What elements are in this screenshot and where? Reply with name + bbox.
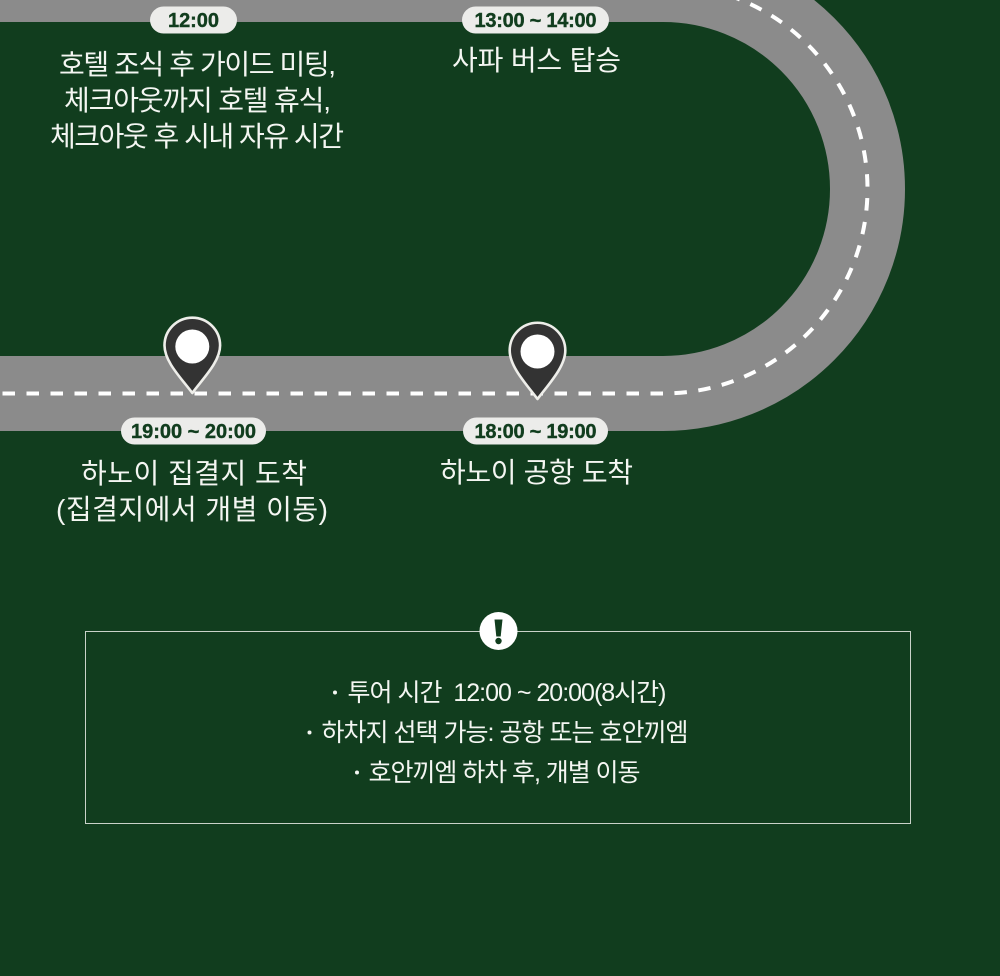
time pill: 12:00: [150, 6, 237, 34]
text: hanoi meeting point: (집결지에서 개별 이동): [56, 494, 328, 525]
time pill: 18:00 ~ 19:00: [463, 418, 608, 444]
text: hotel schedule: [50, 49, 344, 152]
time pill: 13:00 ~ 14:00: [462, 6, 609, 34]
notice box: [86, 632, 910, 824]
icon: exclamation: [480, 612, 518, 650]
pin: 하노이 집결지: [164, 318, 220, 393]
text: hanoi meeting point: 하노이 집결지 도착: [81, 458, 307, 489]
road: [0, 0, 868, 394]
pin: 하노이 공항: [510, 323, 565, 399]
text: hanoi airport: 하노이 공항 도착: [440, 457, 633, 488]
time pill: 19:00 ~ 20:00: 19:00 ~ 20:00: [131, 421, 256, 443]
notice text: 투어 시간 12:00 ~ 20:00(8시간): [348, 679, 666, 707]
text: sapa bus: 사파 버스 탑승: [452, 45, 621, 76]
text: hotel schedule: 호텔 조식 후 가이드 미팅,: [59, 49, 336, 80]
notice bullets: [308, 690, 359, 774]
notice text: 호안끼엠 하차 후, 개별 이동: [368, 759, 640, 787]
text: hanoi meeting point: [56, 458, 328, 525]
notice text: 하차지 선택 가능: 공항 또는 호안끼엠: [322, 719, 688, 747]
notice text: [322, 679, 688, 787]
time pill: 13:00 ~ 14:00: 13:00 ~ 14:00: [474, 10, 596, 32]
time pill: 18:00 ~ 19:00: 18:00 ~ 19:00: [474, 421, 596, 443]
time pill: 12:00: 12:00: [168, 10, 219, 32]
text: hotel schedule: 체크아웃까지 호텔 휴식,: [64, 85, 331, 116]
text: hotel schedule: 체크아웃 후 시내 자유 시간: [50, 121, 344, 152]
